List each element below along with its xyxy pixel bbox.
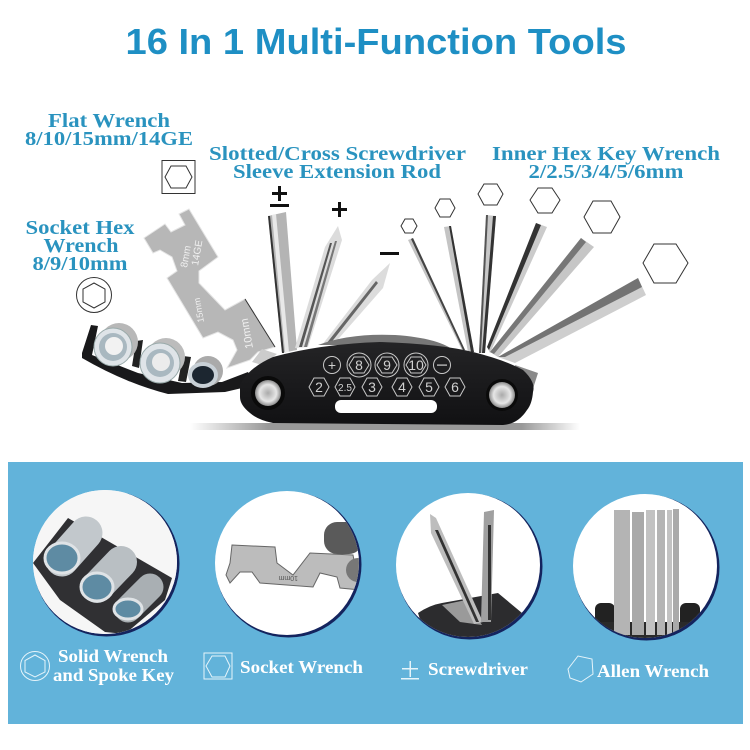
feature: socket wrench label: Socket Wrench	[240, 657, 363, 677]
feature: allen wrench label	[568, 656, 709, 682]
sockets	[94, 323, 223, 388]
circle: allen wrench photo	[573, 494, 720, 642]
icon: socket hex circle	[76, 278, 112, 312]
label: inner hex key: 2/2.5/3/4/5/6mm	[528, 161, 684, 183]
screwdriver: phillips	[295, 226, 342, 348]
socket tray	[82, 325, 255, 394]
size markings: bottom row: 4	[398, 379, 406, 395]
size markings: bottom row	[309, 378, 465, 396]
size markings: bottom row: 2.5	[338, 383, 352, 394]
icon: minus	[380, 252, 399, 255]
label: screwdriver: Sleeve Extension Rod	[233, 161, 441, 183]
label: screwdriver	[209, 143, 466, 183]
size markings: top row: 8	[355, 357, 363, 373]
feature: solid wrench label: Solid Wrench	[58, 646, 168, 666]
label: flat wrench: Flat Wrench	[48, 110, 170, 132]
flat wrench: 14GE	[190, 239, 205, 267]
circle: flat wrench photo	[215, 491, 370, 638]
label: inner hex key	[492, 143, 720, 183]
flat wrench: 10mm	[239, 317, 256, 350]
size markings: top row: 10	[408, 357, 424, 373]
size markings: bottom row: 3	[368, 379, 376, 395]
feature: socket wrench label	[204, 653, 363, 679]
size markings: bottom row: 2	[315, 379, 323, 395]
circle: sockets photo	[33, 490, 180, 636]
icon: flat wrench square hex	[162, 160, 195, 194]
multitool body	[240, 335, 538, 425]
ground shadow	[190, 423, 580, 430]
label: screwdriver: Slotted/Cross Screwdriver	[209, 143, 466, 165]
label: socket hex wrench: 8/9/10mm	[32, 253, 128, 275]
panel: blue feature band	[8, 462, 743, 724]
flat wrench	[144, 209, 275, 368]
label: inner hex key: Inner Hex Key Wrench	[492, 143, 720, 165]
title: 16 In 1 Multi-Function Tools	[126, 21, 626, 62]
icon: plus minus	[270, 186, 289, 207]
size markings: bottom row: 5	[425, 379, 433, 395]
bolt: right	[486, 379, 518, 411]
feature: allen wrench label: Allen Wrench	[597, 661, 709, 681]
size markings: bottom row: 6	[451, 379, 459, 395]
circle: screwdriver photo	[396, 493, 542, 650]
feature: screwdriver label: Screwdriver	[428, 659, 528, 679]
screwdriver: flat	[268, 212, 297, 353]
label: socket hex wrench: Wrench	[44, 235, 118, 257]
bolt: left	[251, 376, 285, 410]
screwdriver: slotted	[322, 263, 390, 345]
slot	[335, 400, 437, 413]
label: socket hex wrench	[26, 217, 134, 275]
icon: plus	[332, 202, 347, 217]
flat wrench: 15mm	[192, 297, 206, 323]
label: socket hex wrench: Socket Hex	[26, 217, 134, 239]
size markings: top row	[324, 353, 450, 377]
label: flat wrench: 8/10/15mm/14GE	[25, 128, 193, 150]
size markings: top row: +	[328, 357, 336, 373]
circle: flat wrench photo: 10mm	[278, 574, 298, 581]
label: flat wrench	[25, 110, 193, 150]
size markings: top row: 9	[383, 357, 391, 373]
feature: solid wrench label	[20, 646, 174, 685]
hex size icons	[401, 184, 688, 283]
flat wrench: 8mm	[179, 245, 194, 269]
hex keys	[408, 215, 646, 363]
feature: solid wrench label: and Spoke Key	[53, 665, 174, 685]
